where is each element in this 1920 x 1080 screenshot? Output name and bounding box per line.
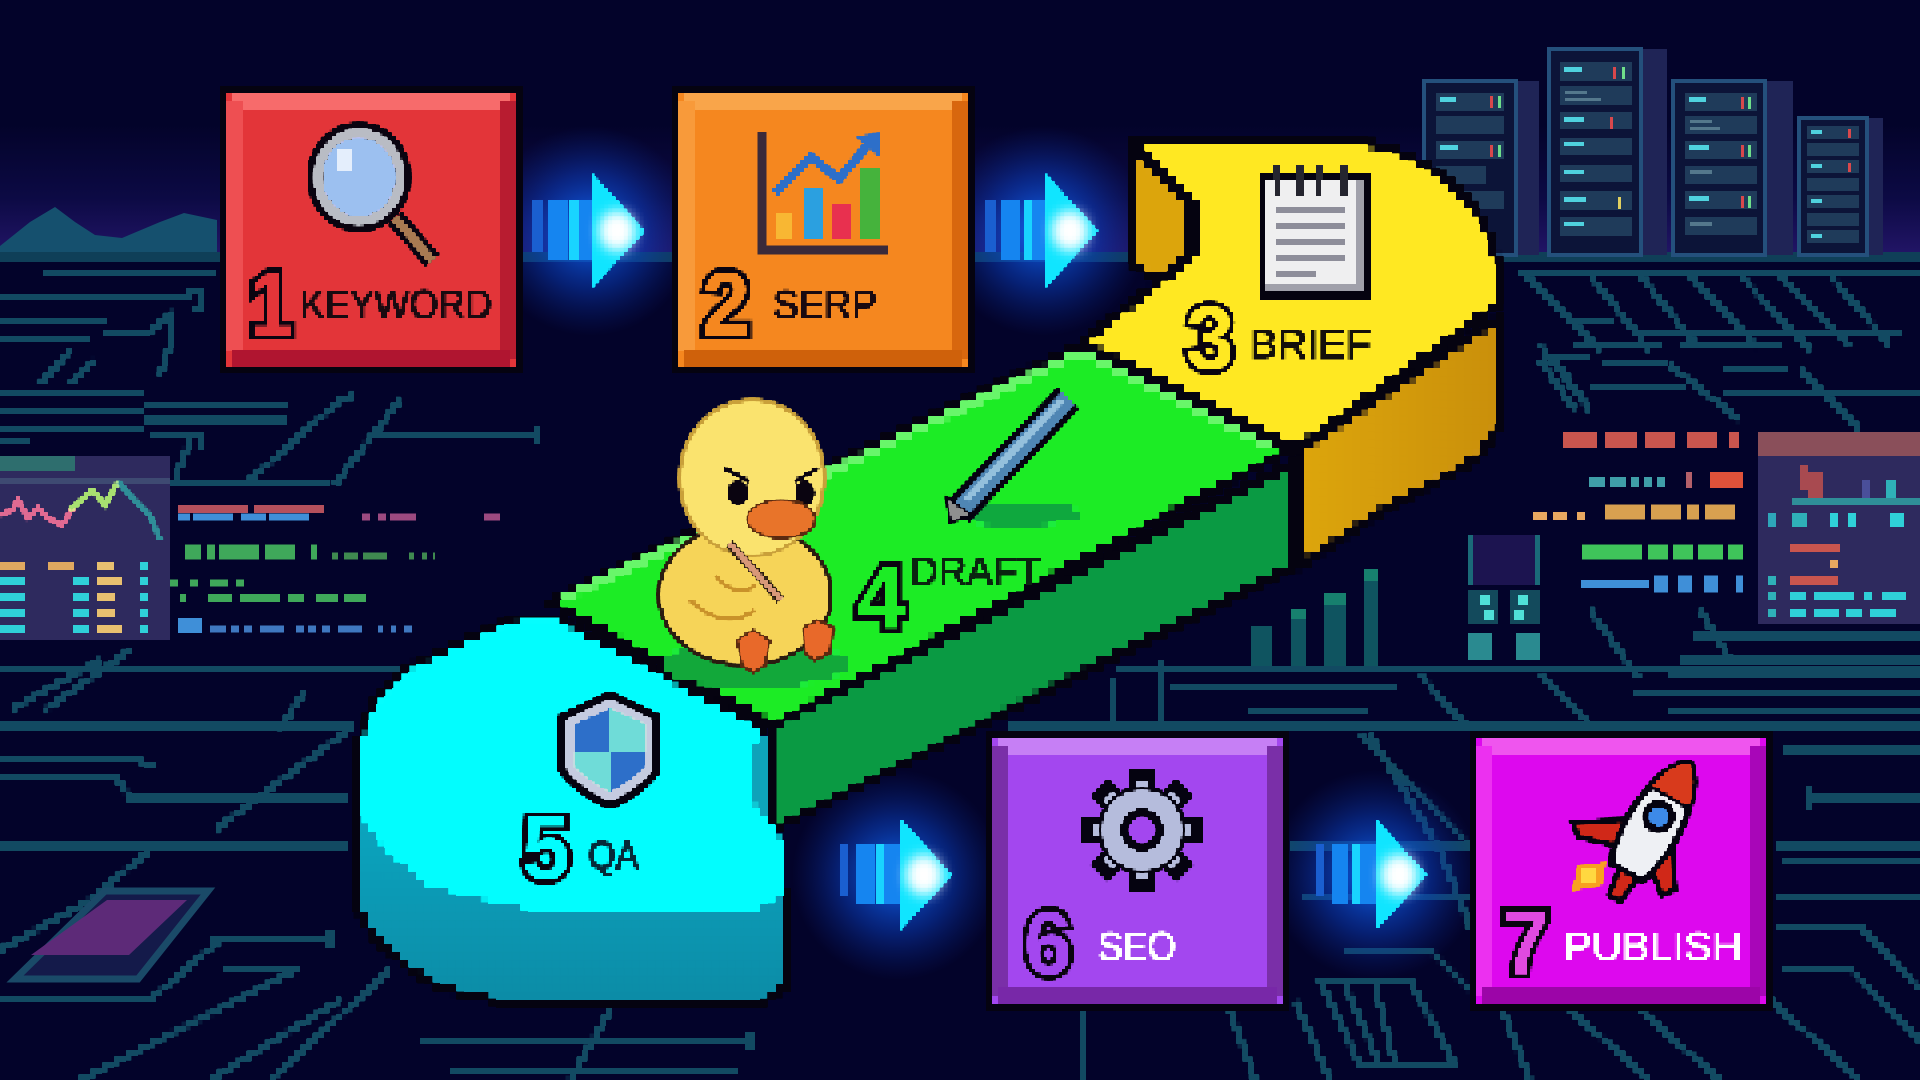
label: keyword: KEYWORD	[300, 283, 492, 327]
arrow 5 to 6	[840, 818, 952, 931]
stage 3 top surface	[1082, 141, 1499, 448]
rack 1	[1424, 81, 1539, 255]
stage 4 top surface	[551, 345, 1288, 725]
mountains	[0, 207, 217, 256]
card 7: publish	[1470, 726, 1773, 1011]
step number 5: 5	[522, 799, 570, 899]
step number 6: 6	[1024, 894, 1072, 994]
card 1: keyword	[220, 86, 523, 373]
circuit chip	[15, 891, 208, 979]
sparkline	[0, 482, 160, 540]
label: publish: PUBLISH	[1564, 925, 1742, 969]
data rows	[0, 562, 25, 570]
icon: notepad	[1260, 166, 1370, 301]
rack 4	[1799, 118, 1883, 255]
winding road	[355, 141, 1499, 1003]
dashboard screen left	[0, 456, 170, 640]
step number 3: 3	[1186, 289, 1234, 389]
stage 3 side face	[1299, 318, 1499, 566]
icon: gear	[1082, 770, 1202, 891]
body	[659, 525, 831, 665]
label: draft: DRAFT	[910, 550, 1041, 594]
stage 4 side face	[775, 465, 1293, 828]
icon: shield	[558, 691, 661, 809]
step number 1: 1	[249, 255, 293, 355]
eyes and brows	[727, 480, 749, 506]
circuit board traces	[0, 274, 1920, 1080]
step number 4: 4	[857, 548, 905, 648]
pencil in wing	[729, 543, 781, 600]
bar chart background	[1251, 569, 1378, 666]
icon: pencil	[947, 398, 1068, 522]
feet	[737, 630, 770, 672]
code lines left	[170, 509, 500, 633]
label: brief: BRIEF	[1250, 323, 1371, 367]
code lines right	[1533, 440, 1743, 584]
icon: rocket	[1551, 726, 1734, 922]
label: seo: SEO	[1098, 925, 1176, 969]
rack 3	[1673, 81, 1793, 255]
arrow 2 to 3	[986, 174, 1098, 287]
label: qa: QA	[588, 834, 639, 878]
duck mascot	[659, 400, 833, 672]
arrow 6 to 7	[1315, 818, 1427, 931]
stage 5 side face	[355, 802, 784, 1003]
icon: rising bar chart	[762, 133, 888, 250]
dashboard screen right	[1758, 432, 1920, 624]
server racks	[1424, 49, 1883, 255]
arrow 1 to 2	[533, 174, 645, 287]
step number 2: 2	[702, 255, 750, 355]
step number 7: 7	[1502, 894, 1549, 994]
head	[680, 400, 824, 556]
horizon line	[0, 252, 1920, 262]
icon: magnifying glass	[315, 130, 432, 260]
label: serp: SERP	[773, 283, 877, 327]
circuit chip center	[1468, 535, 1540, 660]
arrow glows	[485, 126, 1480, 980]
card 6: seo	[986, 731, 1289, 1011]
rack 2	[1549, 49, 1667, 255]
card 2: serp	[672, 86, 975, 373]
beak	[747, 500, 815, 538]
stage 5 top surface	[355, 617, 784, 914]
